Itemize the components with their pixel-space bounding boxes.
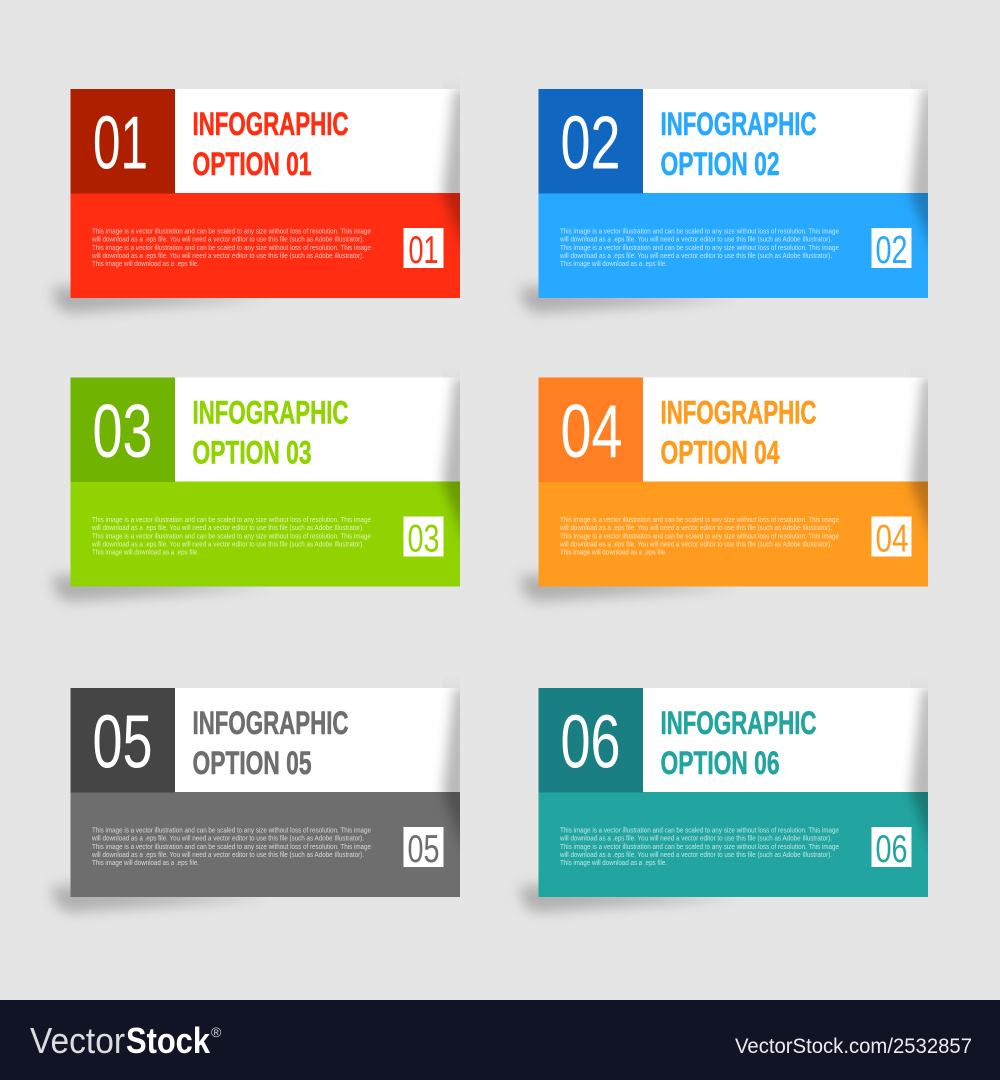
number tile xyxy=(70,89,175,194)
small number badge: 01 xyxy=(408,229,438,272)
heading: INFOGRAPHIC xyxy=(192,106,348,142)
description text: This image is a vector illustration and can be scaled to any size without loss of resolution. This image xyxy=(560,228,839,236)
number tile xyxy=(70,688,175,792)
heading xyxy=(660,705,816,781)
VectorStock logo: ® xyxy=(211,1024,222,1040)
top edge shade xyxy=(910,674,928,688)
heading: INFOGRAPHIC xyxy=(660,705,816,741)
number: 04 xyxy=(560,389,622,473)
number: 02 xyxy=(560,100,620,184)
coloured text band xyxy=(70,792,460,897)
heading xyxy=(192,394,348,470)
description text: will download as a .eps file. You will need a vector editor to use this file (such as Adobe Illustrator). xyxy=(559,836,832,843)
page curl shadow xyxy=(904,89,928,251)
description text: will download as a .eps file. You will need a vector editor to use this file (such as Adobe Illustrator). xyxy=(91,525,364,532)
number: 06 xyxy=(560,700,620,784)
small number badge: 06 xyxy=(876,828,908,871)
description text: will download as a .eps file. You will need a vector editor to use this file (such as Adobe Illustrator). xyxy=(91,542,364,548)
description text: This image is a vector illustration and can be scaled to any size without loss of resolution. This image xyxy=(92,828,371,834)
card 04 xyxy=(520,364,936,602)
top edge shade xyxy=(910,364,928,378)
number tile xyxy=(70,378,175,482)
VectorStock logo xyxy=(30,1020,222,1061)
heading: INFOGRAPHIC xyxy=(192,394,348,430)
description text: This image is a vector illustration and can be scaled to any size without loss of resolution. This image xyxy=(92,517,371,524)
description text: This image will download as a .eps file. xyxy=(560,261,667,268)
page curl shadow xyxy=(904,688,928,846)
page curl shadow xyxy=(436,688,460,842)
white header panel xyxy=(70,378,460,482)
description text: This image will download as a .eps file. xyxy=(92,261,199,268)
image id: VectorStock.com/2532857 xyxy=(735,1035,972,1058)
shadow xyxy=(52,287,270,313)
VectorStock logo: Stock xyxy=(126,1020,211,1061)
shadow xyxy=(520,886,738,912)
description text: will download as a .eps file. You will need a vector editor to use this file (such as Adobe Illustrator). xyxy=(91,852,364,859)
coloured text band xyxy=(538,792,928,897)
number: 01 xyxy=(93,100,148,184)
description text: will download as a .eps file. You will need a vector editor to use this file (such as Adobe Illustrator). xyxy=(559,237,832,244)
heading xyxy=(660,106,816,182)
number: 03 xyxy=(92,389,152,473)
shadow xyxy=(52,576,270,602)
description text: will download as a .eps file. You will need a vector editor to use this file (such as Adobe Illustrator). xyxy=(91,836,364,843)
shadow xyxy=(52,886,270,912)
description text xyxy=(559,828,839,867)
description text xyxy=(559,517,839,557)
page curl shadow xyxy=(904,378,928,540)
shadow xyxy=(520,576,738,602)
white header panel xyxy=(70,89,460,194)
card 06 xyxy=(520,674,936,912)
page curl shadow xyxy=(436,378,460,538)
heading: OPTION 03 xyxy=(192,434,312,470)
heading: OPTION 04 xyxy=(660,434,780,470)
description text: This image is a vector illustration and can be scaled to any size without loss of resolution. This image xyxy=(560,517,839,524)
heading: OPTION 05 xyxy=(192,745,312,781)
card 01 xyxy=(52,75,468,313)
small number badge: 03 xyxy=(408,518,440,560)
heading: OPTION 01 xyxy=(192,146,312,182)
description text: This image is a vector illustration and can be scaled to any size without loss of resolution. This image xyxy=(92,533,371,540)
page curl shadow xyxy=(436,89,460,251)
description text: This image is a vector illustration and can be scaled to any size without loss of resolution. This image xyxy=(92,245,371,252)
white header panel xyxy=(70,688,460,792)
top edge shade xyxy=(442,75,460,89)
heading xyxy=(192,705,348,781)
coloured text band xyxy=(70,482,460,586)
description text: This image will download as a .eps file. xyxy=(560,860,667,867)
card 03 xyxy=(52,364,468,602)
description text: will download as a .eps file. You will need a vector editor to use this file (such as Adobe Illustrator). xyxy=(559,525,832,532)
coloured text band xyxy=(538,193,928,298)
description text: This image is a vector illustration and can be scaled to any size without loss of resolution. This image xyxy=(560,844,839,851)
white header panel xyxy=(538,378,928,482)
description text xyxy=(559,228,839,268)
description text xyxy=(91,228,371,268)
small number badge: 05 xyxy=(408,828,440,871)
description text: This image will download as a .eps file. xyxy=(92,860,199,867)
description text: will download as a .eps file. You will need a vector editor to use this file (such as Adobe Illustrator). xyxy=(559,852,832,859)
number tile xyxy=(538,378,643,482)
description text: will download as a .eps file. You will need a vector editor to use this file (such as Adobe Illustrator). xyxy=(91,237,364,244)
heading: OPTION 02 xyxy=(660,146,780,182)
VectorStock logo: Vector xyxy=(30,1020,125,1061)
small number badge: 04 xyxy=(876,518,908,560)
heading: INFOGRAPHIC xyxy=(192,705,348,741)
top edge shade xyxy=(442,674,460,688)
description text: This image is a vector illustration and can be scaled to any size without loss of resolution. This image xyxy=(560,245,839,252)
white header panel xyxy=(538,89,928,194)
top edge shade xyxy=(910,75,928,89)
description text xyxy=(91,828,371,867)
description text xyxy=(91,517,371,557)
card 05 xyxy=(52,674,468,912)
heading xyxy=(192,106,348,182)
number tile xyxy=(538,89,643,194)
description text: will download as a .eps file. You will need a vector editor to use this file (such as Adobe Illustrator). xyxy=(559,253,832,260)
heading: INFOGRAPHIC xyxy=(660,394,816,430)
description text: This image is a vector illustration and can be scaled to any size without loss of resolution. This image xyxy=(92,228,371,236)
description text: This image will download as a .eps file. xyxy=(560,550,667,557)
footer bar xyxy=(0,1000,1000,1080)
white header panel xyxy=(538,688,928,792)
coloured text band xyxy=(538,482,928,586)
heading xyxy=(660,394,816,470)
number: 05 xyxy=(92,700,152,784)
description text: This image is a vector illustration and can be scaled to any size without loss of resolution. This image xyxy=(92,844,371,851)
description text: will download as a .eps file. You will need a vector editor to use this file (such as Adobe Illustrator). xyxy=(91,253,364,260)
description text: This image will download as a .eps file. xyxy=(92,550,199,557)
number tile xyxy=(538,688,643,792)
shadow xyxy=(520,287,738,313)
heading: INFOGRAPHIC xyxy=(660,106,816,142)
coloured text band xyxy=(70,193,460,298)
top edge shade xyxy=(442,364,460,378)
description text: will download as a .eps file. You will need a vector editor to use this file (such as Adobe Illustrator). xyxy=(559,542,832,548)
description text: This image is a vector illustration and can be scaled to any size without loss of resolution. This image xyxy=(560,533,839,540)
small number badge: 02 xyxy=(876,229,908,272)
description text: This image is a vector illustration and can be scaled to any size without loss of resolution. This image xyxy=(560,828,839,834)
card 02 xyxy=(520,75,936,313)
heading: OPTION 06 xyxy=(660,745,780,781)
